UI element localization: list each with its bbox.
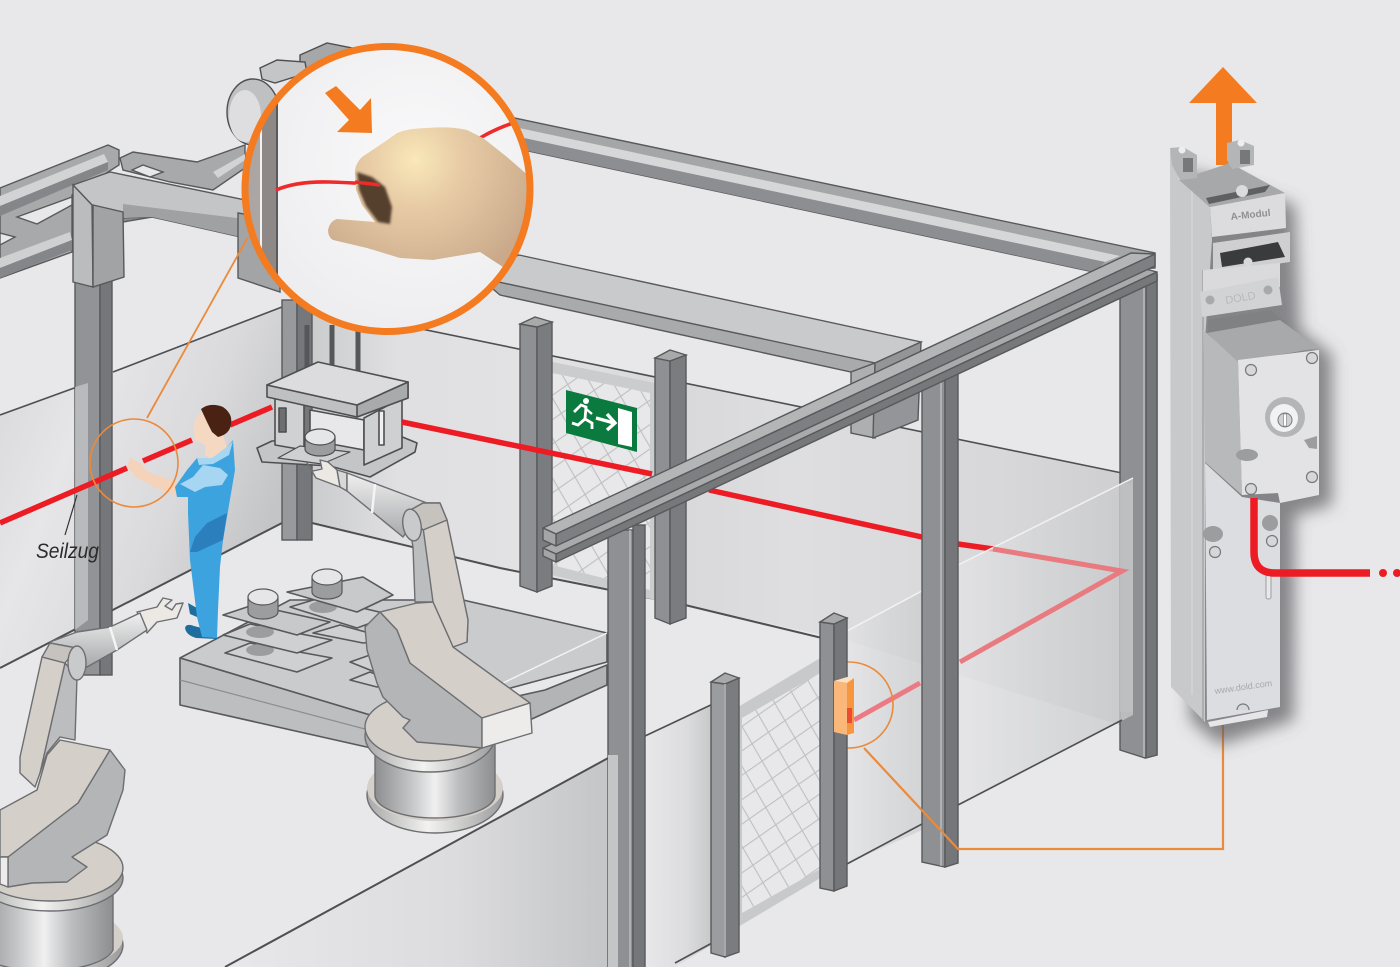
left robot base xyxy=(0,835,123,967)
red rope pull line xyxy=(0,407,993,549)
back wall panel xyxy=(300,303,1122,725)
latches xyxy=(1203,436,1317,542)
glass strip on left post xyxy=(75,383,88,630)
right side rear post xyxy=(1120,275,1157,758)
press unit with rods xyxy=(257,325,417,477)
front double top rails xyxy=(543,253,1157,562)
lower body side xyxy=(1203,330,1242,495)
left robot gripper and forearm xyxy=(50,598,183,667)
right robot arm xyxy=(400,503,468,647)
front post xyxy=(608,525,645,967)
table with work plates xyxy=(180,569,607,750)
web address: www.dold.com xyxy=(1213,678,1273,696)
door with mesh xyxy=(543,360,655,600)
left post xyxy=(75,280,112,675)
small orange zoom circle on sensor xyxy=(805,662,893,748)
module shadow xyxy=(1190,170,1332,745)
pulley housing xyxy=(227,43,352,145)
module side face xyxy=(1170,150,1212,722)
left robot body and arm xyxy=(0,643,125,887)
front wall panel next to gate xyxy=(645,703,715,967)
recess xyxy=(1208,310,1285,336)
gate with mesh xyxy=(738,657,822,927)
translucent panel right xyxy=(958,478,1133,805)
front wall panel left xyxy=(225,757,610,967)
orange sensor xyxy=(834,677,854,735)
gate right post xyxy=(820,613,847,891)
rear top rail to corner xyxy=(505,116,1155,272)
door posts xyxy=(520,317,686,624)
bottom tab xyxy=(1208,710,1268,727)
faded rope line behind panels xyxy=(854,549,1122,720)
thin orange zoom circle on rope xyxy=(90,419,178,507)
orange connection line from sensor to module xyxy=(864,725,1223,849)
lens contents xyxy=(248,104,526,274)
A-Modul label: A-Modul xyxy=(1230,208,1271,223)
orange arrow pressing on rope xyxy=(325,86,372,133)
DOLD embossing: DOLD xyxy=(1224,290,1257,307)
module top face xyxy=(1179,163,1285,207)
post behind press xyxy=(282,300,312,540)
window block xyxy=(1213,232,1290,273)
emergency exit sign xyxy=(566,390,637,452)
label: Seilzug: Seilzug xyxy=(36,540,99,563)
key cylinder xyxy=(1265,397,1305,437)
terminal left xyxy=(1170,146,1197,180)
red line from module with dots xyxy=(1254,498,1400,577)
slot xyxy=(1266,573,1271,599)
translucent panel middle xyxy=(845,585,935,865)
lock box front xyxy=(1238,350,1319,503)
orange leader line to magnifier xyxy=(147,237,248,418)
terminal right xyxy=(1227,140,1254,169)
rear overhead rail structure left xyxy=(0,145,245,278)
right robot body xyxy=(365,602,532,748)
screws xyxy=(1210,352,1318,710)
module neck xyxy=(1203,263,1280,295)
lock box top xyxy=(1207,320,1318,362)
gate left post xyxy=(711,673,739,957)
magnifier lens xyxy=(240,40,535,340)
middle post xyxy=(922,372,958,867)
DOLD band xyxy=(1200,277,1282,317)
worker in blue overalls xyxy=(127,405,235,639)
lower body plate xyxy=(1205,463,1280,720)
orange pull arrow xyxy=(1189,67,1257,165)
long overhead beam xyxy=(73,172,921,438)
right robot rear forearm and gripper xyxy=(307,460,427,537)
safety switch module xyxy=(1170,67,1332,745)
Seilzug leader line xyxy=(65,495,77,535)
A-Modul block xyxy=(1210,193,1286,237)
right robot base xyxy=(365,693,503,833)
left wall panel xyxy=(0,307,282,668)
